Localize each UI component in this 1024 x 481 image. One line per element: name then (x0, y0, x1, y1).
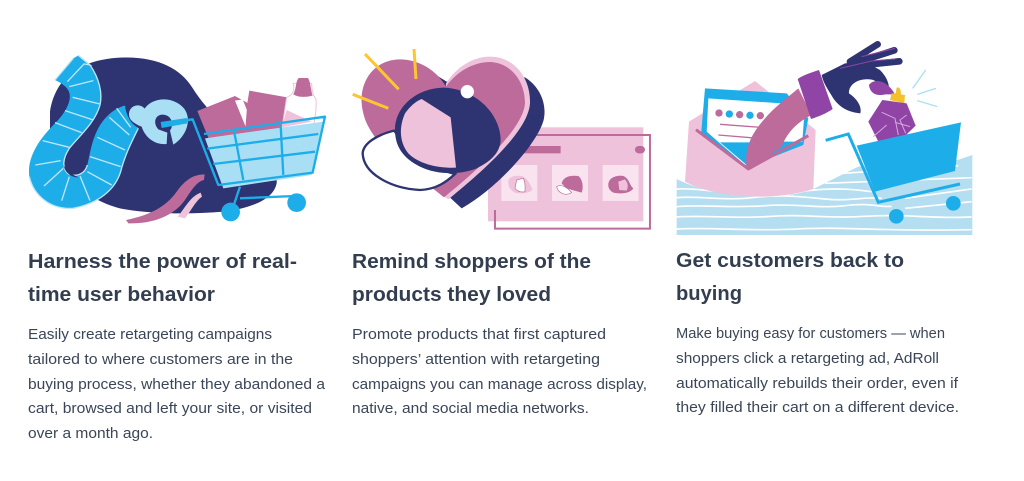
navy blob background (50, 58, 277, 213)
panel: user behavior (28, 55, 326, 442)
body text: shoppers click a retargeting ad, AdRoll (676, 350, 939, 367)
blue shopping cart (826, 122, 961, 224)
wavy blue stripes (677, 155, 972, 235)
body text: Make buying easy for customers — when (676, 325, 945, 342)
navy heart shadow (433, 73, 545, 208)
body text: shoppers’ attention with retargeting (352, 351, 600, 368)
heading: products they loved (352, 283, 551, 306)
body text: Promote products that first captured (352, 326, 606, 343)
body text (676, 325, 959, 416)
body text: they filled their cart on a different device. (676, 399, 959, 416)
heading (352, 250, 591, 306)
heading: time user behavior (28, 283, 215, 306)
heading: Harness the power of real- (28, 250, 297, 273)
panel: loved products (352, 49, 650, 417)
yellow sparks (353, 49, 416, 108)
pink heart (362, 57, 530, 199)
heading: Get customers back to (676, 249, 904, 272)
snake track (29, 55, 138, 208)
perfume bottle (868, 70, 937, 142)
product ad card (488, 127, 650, 229)
body text (28, 326, 326, 442)
baseball cap (363, 85, 501, 190)
cart contents (197, 78, 316, 142)
shopping cart (161, 117, 325, 221)
pink ribbons (126, 174, 205, 223)
body text: buying process, whether they abandoned a (28, 376, 326, 393)
body text: native, and social media networks. (352, 400, 589, 417)
panel: back to buying (676, 44, 972, 416)
heading (28, 250, 297, 306)
body text: tailored to where customers are in the (28, 351, 293, 368)
body text: over a month ago. (28, 425, 153, 442)
body text (352, 326, 647, 417)
body text: campaigns you can manage across display, (352, 376, 647, 393)
navy gloved hand (822, 44, 899, 113)
light blue hook (129, 99, 188, 145)
body text: Easily create retargeting campaigns (28, 326, 272, 343)
pink envelope (685, 81, 816, 197)
body text: automatically rebuilds their order, even if (676, 375, 959, 392)
illustration: envelope, hand and cart (677, 44, 972, 235)
body text: cart, browsed and left your site, or visited (28, 400, 312, 417)
illustration: heart, cap and product ad (353, 49, 650, 229)
illustration: snake path and shopping cart (29, 55, 325, 223)
heading: buying (676, 282, 742, 305)
heading (676, 249, 904, 305)
arm (746, 70, 833, 169)
heading: Remind shoppers of the (352, 250, 591, 273)
